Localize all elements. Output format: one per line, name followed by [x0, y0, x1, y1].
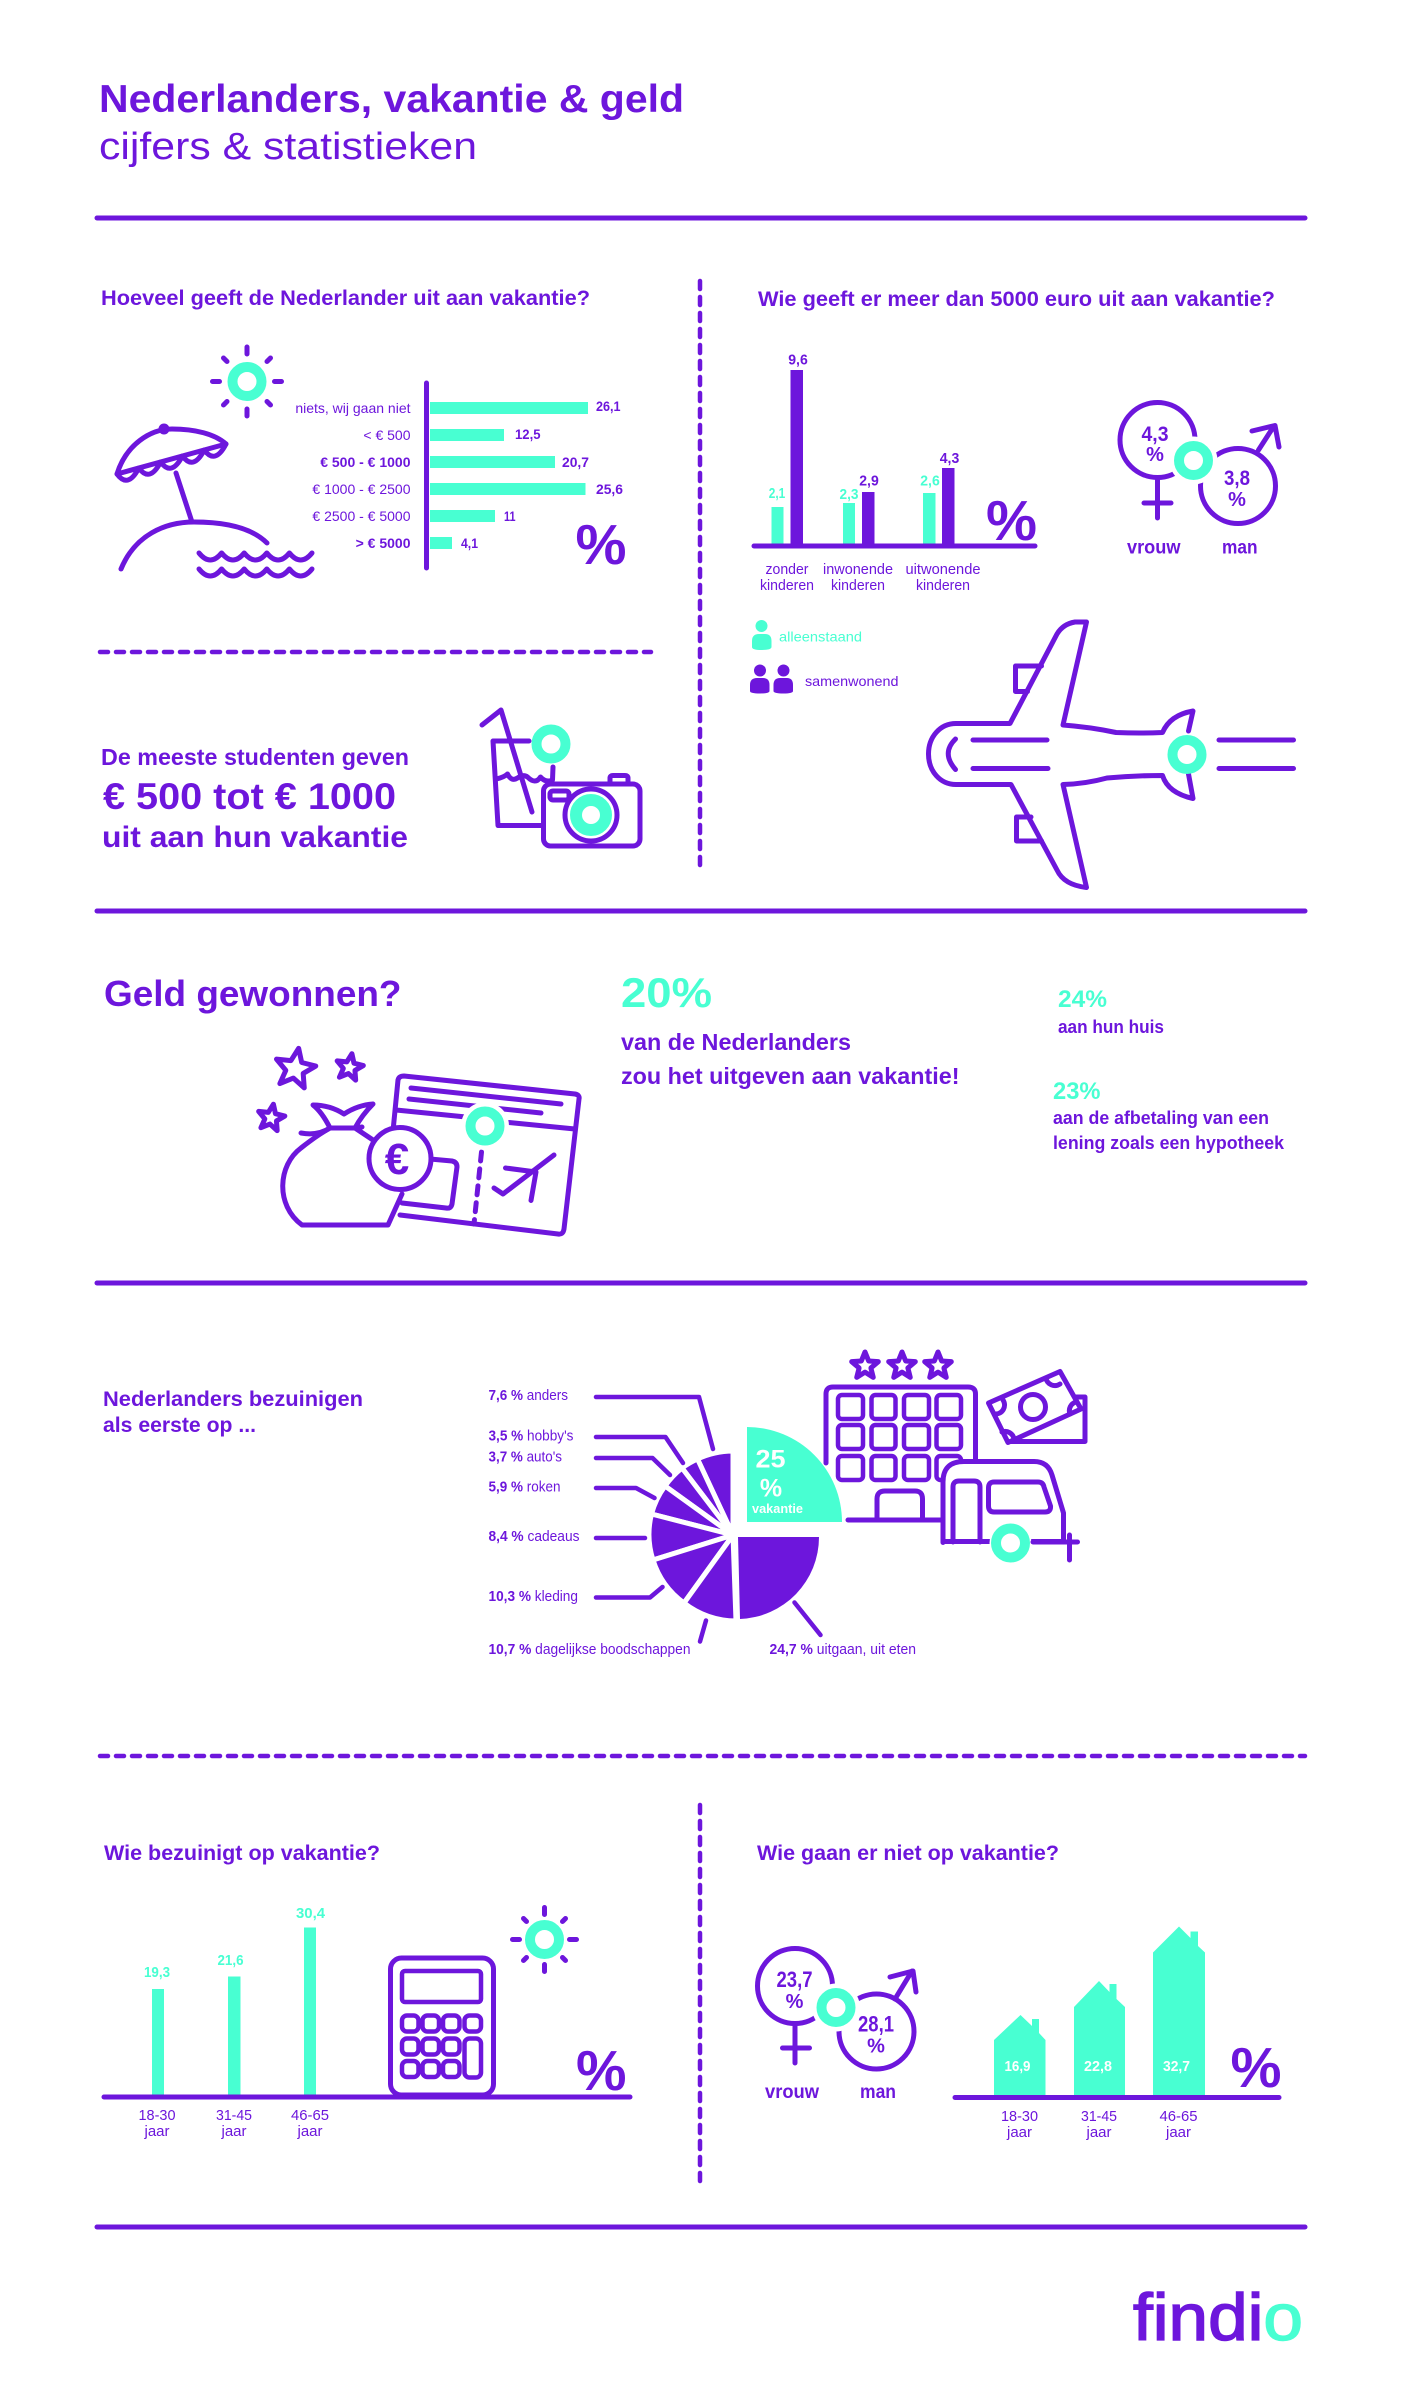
bar chart: age groups: 46-65 — [291, 2107, 329, 2124]
stat: 23 percent: aan de afbetaling van een — [1053, 1108, 1269, 1128]
icon: gender split: % — [1228, 489, 1246, 511]
text: students — [101, 744, 409, 854]
pie labels: 3,7 % auto's — [488, 1450, 562, 1466]
icon: calculator — [390, 1958, 494, 2095]
bar chart: household type: uitwonende — [906, 562, 980, 578]
bar chart: spending: 12,5 — [515, 426, 541, 442]
bar chart: age groups: 19,3 — [144, 1964, 170, 1981]
title — [99, 78, 684, 168]
bar chart: spending: 4,1 — [461, 535, 478, 551]
heading: Hoeveel geeft: Hoeveel geeft de Nederlander uit aan vakantie? — [101, 287, 590, 310]
stat: 23 percent: lening zoals een hypotheek — [1053, 1133, 1285, 1153]
chart: houses: jaar — [1085, 2124, 1112, 2141]
pie labels: 3,5 % hobby's — [488, 1428, 574, 1444]
percent sign: % — [1230, 2036, 1282, 2100]
icon: gender split: vrouw — [1127, 538, 1181, 558]
heading: Geld gewonnen: Geld gewonnen? — [104, 973, 402, 1014]
pie labels: 5,9 % roken — [488, 1480, 560, 1496]
pie chart: 25 — [756, 1446, 786, 1474]
bar chart: household type: 2,1 — [769, 485, 785, 502]
stat: 24 percent: aan hun huis — [1058, 1017, 1164, 1037]
icon: sun — [212, 347, 282, 416]
bar chart: spending: 11 — [504, 508, 516, 524]
bar chart: household type: kinderen — [916, 578, 970, 594]
legend: samenwonend: samenwonend — [805, 673, 898, 689]
bar chart: spending: 20,7 — [562, 454, 589, 470]
icon: gender split: 23,7 — [776, 1967, 812, 1992]
icon: gender split: man — [860, 2082, 896, 2103]
bar chart: spending — [295, 383, 623, 568]
chart: houses: 18-30 — [1001, 2108, 1038, 2125]
bar chart: household type: inwonende — [823, 562, 893, 578]
icon: gender split: vrouw — [765, 2082, 819, 2103]
pie labels: 10,7 % dagelijkse boodschappen — [488, 1642, 690, 1658]
percent sign: % — [576, 513, 626, 577]
heading: Wie geeft: Wie geeft er meer dan 5000 euro uit aan vakantie? — [758, 288, 1275, 311]
bar chart: spending: > € 5000 — [356, 535, 411, 551]
pie chart — [649, 1427, 842, 1621]
icon: gender split: % — [867, 2036, 885, 2058]
stat: 20 percent: zou het uitgeven aan vakantie! — [621, 1063, 960, 1089]
heading: Nederlanders bezuinigen: als eerste op ... — [103, 1414, 256, 1437]
bar chart: spending: 26,1 — [596, 398, 621, 414]
chart: houses: 31-45 — [1081, 2108, 1117, 2125]
stat: 20 percent: van de Nederlanders — [621, 1029, 851, 1055]
pie leader lines — [596, 1397, 820, 1642]
bar chart: age groups — [138, 1905, 329, 2140]
bar chart: household type: kinderen — [760, 578, 814, 594]
bar chart: household type: 9,6 — [788, 352, 808, 368]
chart: houses: 16,9 — [1004, 2059, 1030, 2075]
bar chart: age groups: jaar — [296, 2123, 323, 2140]
icon: gender split — [758, 1948, 916, 2103]
panel: spending on holiday — [101, 287, 626, 577]
pie labels: 10,3 % kleding — [488, 1589, 578, 1605]
bar chart: household type: 2,3 — [840, 486, 858, 503]
stat: 23 percent: 23% — [1053, 1078, 1100, 1105]
bar chart: household type: kinderen — [831, 578, 885, 594]
stat: 20 percent — [621, 969, 960, 1089]
icon: sun — [512, 1908, 576, 1972]
pie labels: 7,6 % anders — [488, 1388, 568, 1404]
bar chart: age groups: 30,4 — [296, 1905, 326, 1922]
icon: drink and camera — [482, 710, 640, 846]
chart: houses: 46-65 — [1160, 2108, 1198, 2125]
bar chart: age groups: 21,6 — [218, 1952, 244, 1969]
legend: samenwonend — [750, 664, 898, 694]
legend: alleenstaand: alleenstaand — [779, 628, 862, 644]
bar chart: spending: € 1000 - € 2500 — [312, 481, 411, 497]
bar chart: household type — [754, 352, 1035, 594]
pie chart: vakantie — [752, 1502, 803, 1516]
chart: houses: jaar — [1165, 2124, 1191, 2141]
bar chart: spending: niets, wij gaan niet — [295, 400, 411, 416]
icon: gender split: 3,8 — [1224, 467, 1250, 490]
text: students: uit aan hun vakantie — [102, 821, 408, 854]
heading: Wie bezuinigt: Wie bezuinigt op vakantie? — [104, 1842, 380, 1865]
title: cijfers & statistieken — [99, 126, 477, 168]
stat: 24 percent: 24% — [1058, 986, 1107, 1013]
pie labels: 8,4 % cadeaus — [488, 1529, 580, 1545]
bar chart: household type: 4,3 — [940, 450, 959, 467]
panel: geld gewonnen — [104, 969, 1285, 1234]
bar chart: age groups: jaar — [220, 2123, 247, 2140]
pie labels: 24,7 % uitgaan, uit eten — [770, 1642, 916, 1658]
icon: gender split: 28,1 — [858, 2012, 894, 2036]
bar chart: age groups: 18-30 — [138, 2107, 176, 2124]
chart: houses: 22,8 — [1084, 2059, 1112, 2075]
bar chart: household type: 2,6 — [920, 472, 940, 490]
panel: students — [101, 710, 640, 854]
bar chart: spending: < € 500 — [363, 427, 411, 443]
heading: Nederlanders bezuinigen: Nederlanders bezuinigen — [103, 1388, 363, 1411]
chart: houses — [955, 1926, 1279, 2141]
chart: houses: 32,7 — [1163, 2059, 1190, 2075]
percent sign: % — [576, 2039, 626, 2103]
heading: Nederlanders bezuinigen — [103, 1388, 363, 1437]
bar chart: spending: € 2500 - € 5000 — [312, 508, 411, 524]
chart: houses: jaar — [1006, 2124, 1032, 2141]
legend: alleenstaand — [752, 620, 862, 650]
bar chart: spending: 25,6 — [596, 481, 623, 497]
text: students: € 500 tot € 1000 — [103, 776, 396, 817]
panel: wie gaan niet — [757, 1842, 1282, 2141]
pie chart: % — [760, 1474, 782, 1502]
icon: beach umbrella and island — [117, 424, 312, 576]
percent sign: % — [986, 489, 1037, 553]
icon: money bag and ticket — [256, 1045, 579, 1234]
bar chart: age groups: jaar — [143, 2123, 170, 2140]
stat: 23 percent — [1053, 1078, 1285, 1153]
stat: 24 percent — [1058, 986, 1164, 1037]
bar chart: household type: 2,9 — [859, 472, 879, 490]
text: students: De meeste studenten geven — [101, 744, 409, 770]
logo: findio: findio — [1133, 2280, 1303, 2354]
title: Nederlanders, vakantie & geld — [99, 78, 684, 121]
bar chart: spending: € 500 - € 1000 — [320, 454, 411, 470]
icon: gender split — [1120, 402, 1279, 558]
panel: over 5000 euro — [750, 288, 1294, 888]
panel: wie bezuinigt — [104, 1842, 630, 2140]
stat: 20 percent: 20% — [621, 969, 712, 1016]
bar chart: age groups: 31-45 — [216, 2107, 252, 2124]
icon: gender split: man — [1222, 538, 1258, 558]
icon: gender split: % — [1146, 444, 1164, 466]
icon: money bag and ticket: € — [385, 1135, 409, 1184]
panel: bezuinigen — [103, 1352, 1085, 1658]
icon: airplane — [928, 622, 1294, 888]
icon: gender split: % — [786, 1991, 804, 2013]
icon: gender split: 4,3 — [1142, 423, 1168, 446]
pie labels — [488, 1388, 916, 1658]
heading: Wie gaan er niet: Wie gaan er niet op vakantie? — [757, 1842, 1059, 1865]
bar chart: household type: zonder — [766, 562, 809, 578]
icon: hotel, money and caravan — [826, 1352, 1085, 1564]
